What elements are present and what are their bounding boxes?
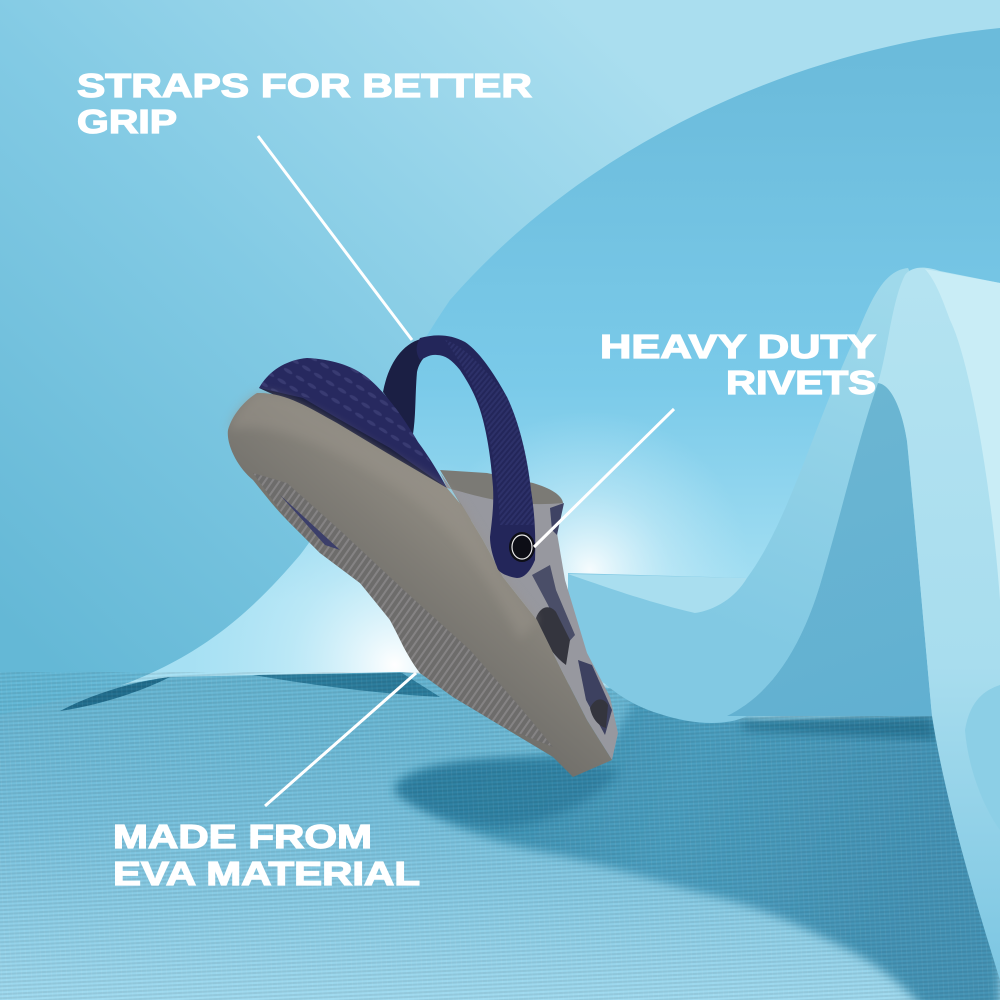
foam inner shaded face bbox=[727, 383, 932, 716]
label: heavy duty rivets: RIVETS bbox=[726, 365, 876, 402]
foam top lit face bbox=[925, 269, 1000, 600]
label: made from EVA material bbox=[113, 819, 420, 893]
background: wave backdrop bbox=[0, 0, 1000, 740]
label: heavy duty rivets bbox=[600, 329, 876, 402]
sandal bbox=[228, 335, 618, 777]
pointer line: EVA material bbox=[265, 673, 416, 806]
inner lining of the clog bbox=[440, 470, 563, 520]
label: straps for better grip bbox=[77, 68, 532, 141]
sole highlight rim bbox=[229, 393, 537, 640]
label: heavy duty rivets: HEAVY DUTY bbox=[600, 329, 876, 366]
label: straps for better grip: GRIP bbox=[77, 104, 177, 141]
label: straps for better grip: STRAPS FOR BETTER bbox=[77, 68, 532, 105]
pointer line: straps bbox=[258, 136, 412, 340]
foam back fold bbox=[965, 685, 1000, 830]
foam rising strip bbox=[660, 268, 914, 716]
woven floor mat bbox=[0, 672, 1000, 1000]
heel cup bbox=[259, 358, 447, 488]
foam right band bbox=[878, 268, 1000, 980]
vent holes bbox=[536, 607, 570, 665]
strap back section bbox=[383, 338, 445, 434]
camouflage upper bbox=[440, 472, 618, 760]
rivet bbox=[509, 532, 535, 562]
strap front section bbox=[417, 335, 535, 578]
pointer line: rivets bbox=[534, 409, 674, 547]
label: made from EVA material: EVA MATERIAL bbox=[113, 856, 420, 893]
foam low flat top and front bbox=[568, 573, 747, 723]
grey outsole bbox=[228, 393, 612, 777]
label: made from EVA material: MADE FROM bbox=[113, 819, 372, 856]
foam sheet on the right bbox=[568, 268, 1000, 980]
tread pattern bbox=[253, 473, 553, 747]
